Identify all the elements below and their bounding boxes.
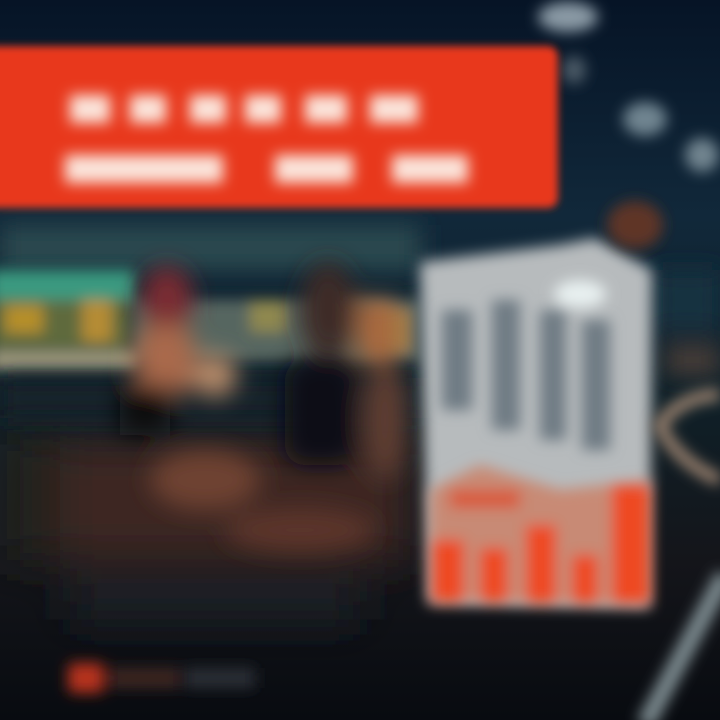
storefront sign	[0, 270, 420, 370]
floor glow	[0, 430, 410, 620]
white report card	[420, 238, 652, 608]
arm at right	[660, 395, 720, 480]
banner text blurred	[65, 95, 468, 183]
diagonal pole bottom right	[645, 575, 720, 720]
dark band under sign	[0, 378, 420, 418]
card highlight	[554, 280, 606, 308]
street band	[0, 225, 720, 375]
figure: right person	[225, 262, 407, 552]
card red section	[430, 465, 650, 605]
red banner	[0, 46, 558, 208]
card grey bars	[442, 300, 610, 450]
hand top of card	[607, 201, 663, 249]
figures: two people	[120, 262, 407, 552]
logo bottom left	[68, 663, 255, 693]
figure: left person	[120, 266, 260, 510]
sky lights	[538, 2, 719, 172]
